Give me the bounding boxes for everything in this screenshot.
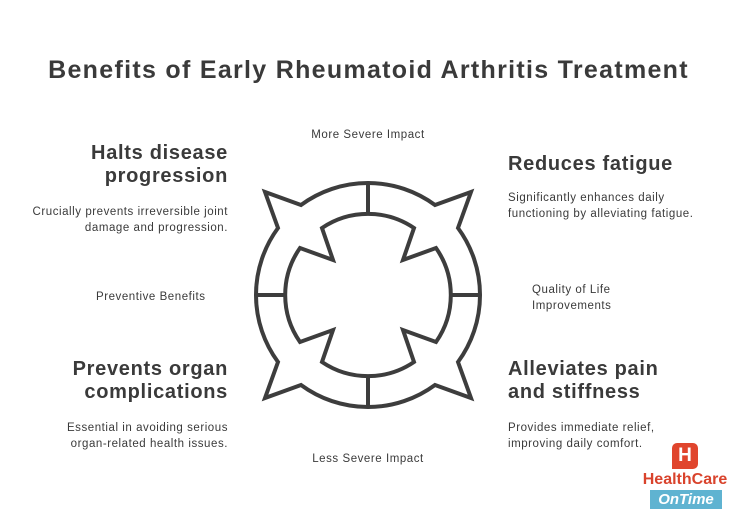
label: quality of life: Quality of Life [532,284,611,296]
logo [643,443,727,509]
block: reduces fatigue: Significantly enhances daily [508,192,665,204]
block: halts disease progression: Halts disease [91,142,228,164]
block: reduces fatigue: Reduces fatigue [508,153,673,175]
block: reduces fatigue [508,153,693,220]
label: quality of life: Improvements [532,300,611,312]
block: prevents organ complications: Prevents organ [73,358,228,380]
block: halts disease progression: damage and progression. [85,222,228,234]
block: halts disease progression [33,142,228,234]
block: alleviates pain: improving daily comfort. [508,438,643,450]
block: prevents organ complications: complications [84,381,228,403]
label: more severe impact: More Severe Impact [311,129,425,141]
logo: OnTime [658,491,714,508]
label: preventive benefits: Preventive Benefits [96,291,206,303]
block: halts disease progression: Crucially prevents irreversible joint [33,206,228,218]
label: quality of life [532,284,611,312]
block: alleviates pain: Provides immediate relief, [508,422,655,434]
block: halts disease progression: progression [105,165,228,187]
icon: H [672,443,698,469]
block: alleviates pain [508,358,659,450]
label: less severe impact: Less Severe Impact [312,453,424,465]
block: prevents organ complications: organ-related health issues. [71,438,228,450]
logo: HealthCare [643,471,727,488]
block: prevents organ complications: Essential in avoiding serious [67,422,228,434]
block: alleviates pain: Alleviates pain [508,358,659,380]
block: reduces fatigue: functioning by alleviating fatigue. [508,208,693,220]
icon: H: H [678,445,692,466]
title: Benefits of Early Rheumatoid Arthritis Treatment [48,56,689,84]
block: alleviates pain: and stiffness [508,381,640,403]
block: prevents organ complications [67,358,228,450]
